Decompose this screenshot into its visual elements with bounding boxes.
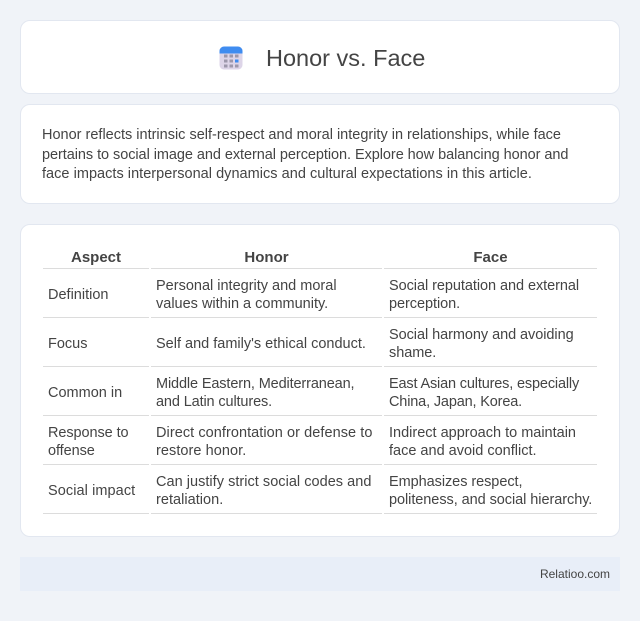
row: social impact: Can justify strict social codes and [156, 474, 371, 490]
row: definition: Personal integrity and moral [156, 278, 337, 294]
table header: Face [473, 249, 508, 266]
row: common in: China, Japan, Korea. [389, 394, 522, 410]
table header: Aspect [71, 249, 121, 266]
table header: Honor [244, 249, 289, 266]
row: focus: Self and family's ethical conduct. [156, 336, 366, 352]
panel: comparison table [20, 224, 620, 537]
row: common in: and Latin cultures. [156, 394, 272, 410]
row: response to offense: Indirect approach to maintain [389, 425, 576, 441]
panel: introduction [20, 104, 620, 204]
row: response to offense: face and avoid conflict. [389, 443, 537, 459]
footer credit: Relatioo.com [540, 567, 610, 581]
row: definition: Definition [48, 287, 108, 303]
row: common in: Common in [48, 385, 122, 401]
row: focus [48, 327, 574, 361]
row: response to offense [48, 425, 576, 459]
row: social impact [48, 474, 592, 508]
row: response to offense: Response to [48, 425, 129, 441]
row: definition [48, 278, 579, 312]
table header [71, 249, 508, 266]
row: social impact: retaliation. [156, 492, 223, 508]
panel: title card [20, 20, 620, 94]
row: definition: perception. [389, 296, 460, 312]
row: focus: Focus [48, 336, 88, 352]
text block: introduction: face impacts interpersonal dynamics and cultural expectations in this article. [42, 166, 532, 182]
icon: calendar [220, 46, 242, 70]
row: common in [48, 376, 580, 410]
row: common in: East Asian cultures, especially [389, 376, 579, 392]
title: Honor vs. Face [266, 45, 425, 71]
text block: introduction [42, 127, 568, 182]
row: social impact: Social impact [48, 483, 135, 499]
row: common in: Middle Eastern, Mediterranean, [156, 376, 354, 392]
row: focus: Social harmony and avoiding [389, 327, 574, 343]
row: response to offense: Direct confrontation or defense to [156, 425, 372, 441]
row: definition: Social reputation and external [389, 278, 579, 294]
row: definition: values within a community. [156, 296, 328, 312]
row: social impact: Emphasizes respect, [389, 474, 522, 490]
text block: introduction: Honor reflects intrinsic self-respect and moral integrity in relationships, while face [42, 127, 561, 143]
row: focus: shame. [389, 345, 436, 361]
row: social impact: politeness, and social hierarchy. [389, 492, 592, 508]
row: response to offense: restore honor. [156, 443, 246, 459]
footer [20, 557, 620, 591]
row: response to offense: offense [48, 443, 95, 459]
text block: introduction: pertains to social image and external perception. Explore how balancing honor and [42, 146, 568, 162]
